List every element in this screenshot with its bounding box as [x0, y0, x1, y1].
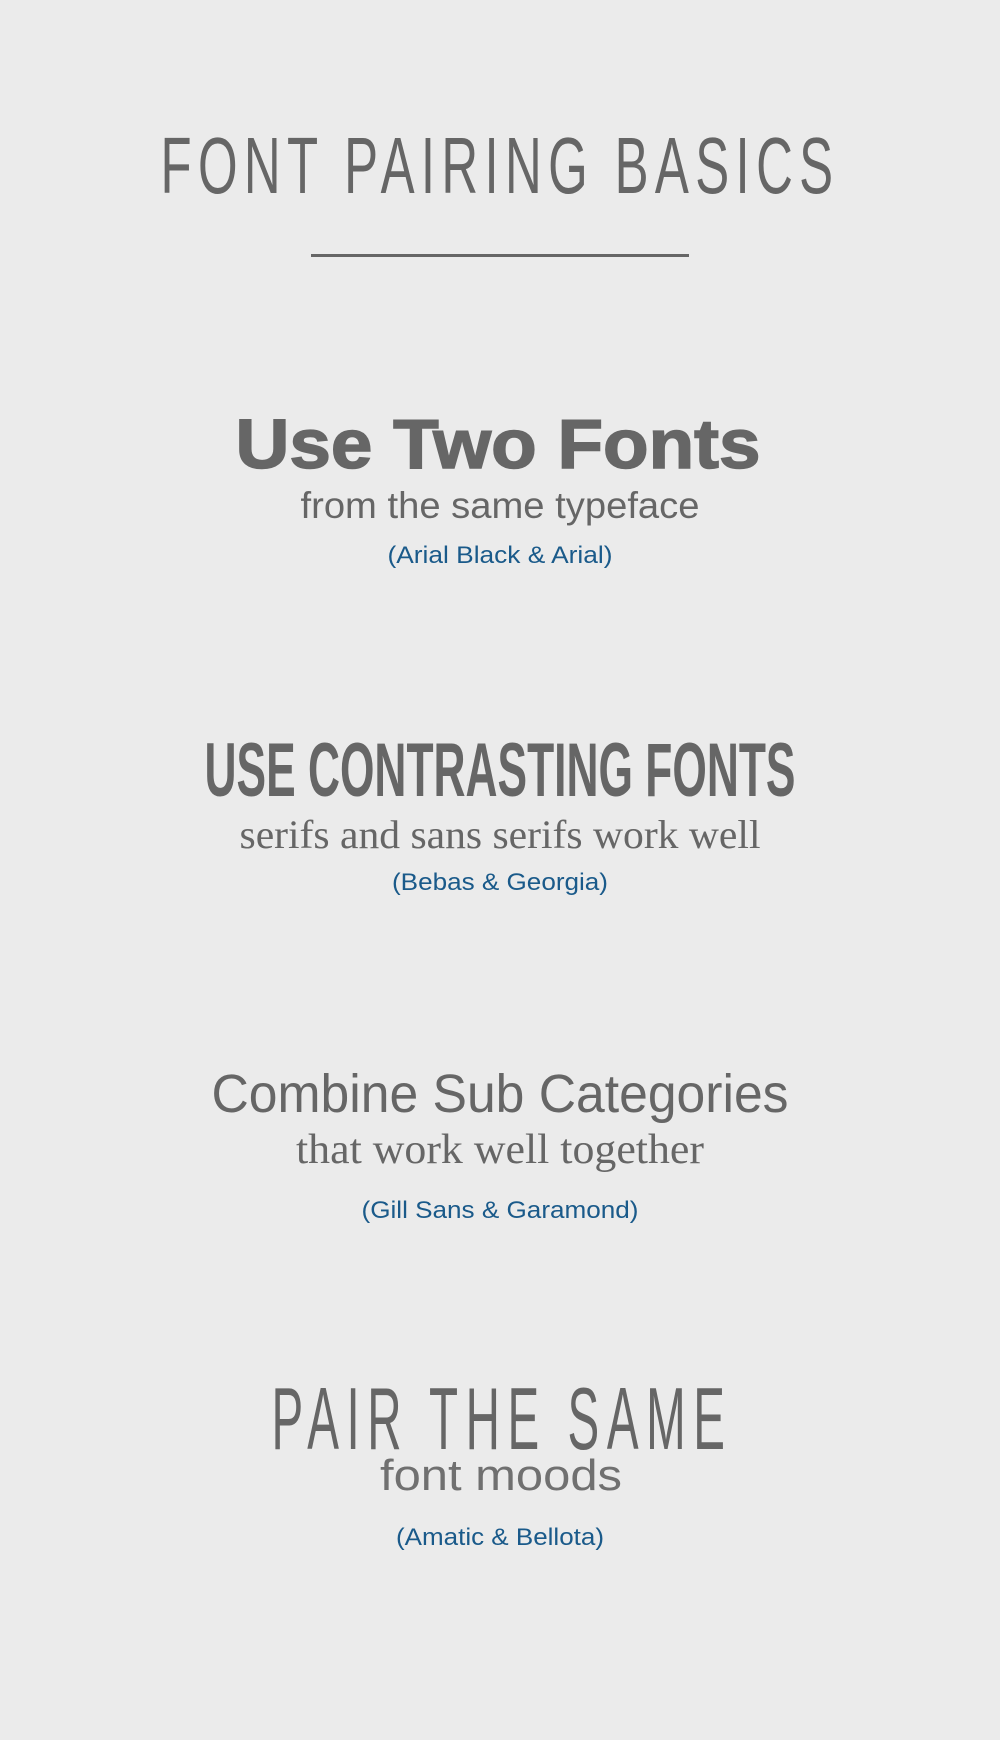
subtext: from the same typeface: from the same typeface	[300, 485, 700, 526]
subtext: that work well together: that work well together	[296, 1127, 704, 1173]
subtext: serifs and sans serifs: serifs and sans serifs work well	[240, 812, 760, 857]
caption: fonts used: (Amatic & Bellota)	[396, 1524, 604, 1551]
heading: Combine Sub Categories: Combine Sub Categories	[212, 1064, 788, 1124]
caption: fonts used: (Gill Sans & Garamond)	[362, 1197, 638, 1224]
section 2: contrasting fonts	[204, 728, 796, 896]
section 4: pair the same	[272, 1369, 732, 1551]
heading: Use Two Fonts: Use Two Fonts	[236, 405, 760, 483]
subtext: font moods: font moods	[380, 1451, 622, 1500]
caption: fonts used: (Arial Black & Arial)	[388, 542, 612, 569]
caption: fonts used: (Bebas & Georgia)	[392, 869, 608, 896]
section 1: use two fonts	[236, 405, 760, 569]
section 3: combine sub categories	[212, 1064, 788, 1224]
